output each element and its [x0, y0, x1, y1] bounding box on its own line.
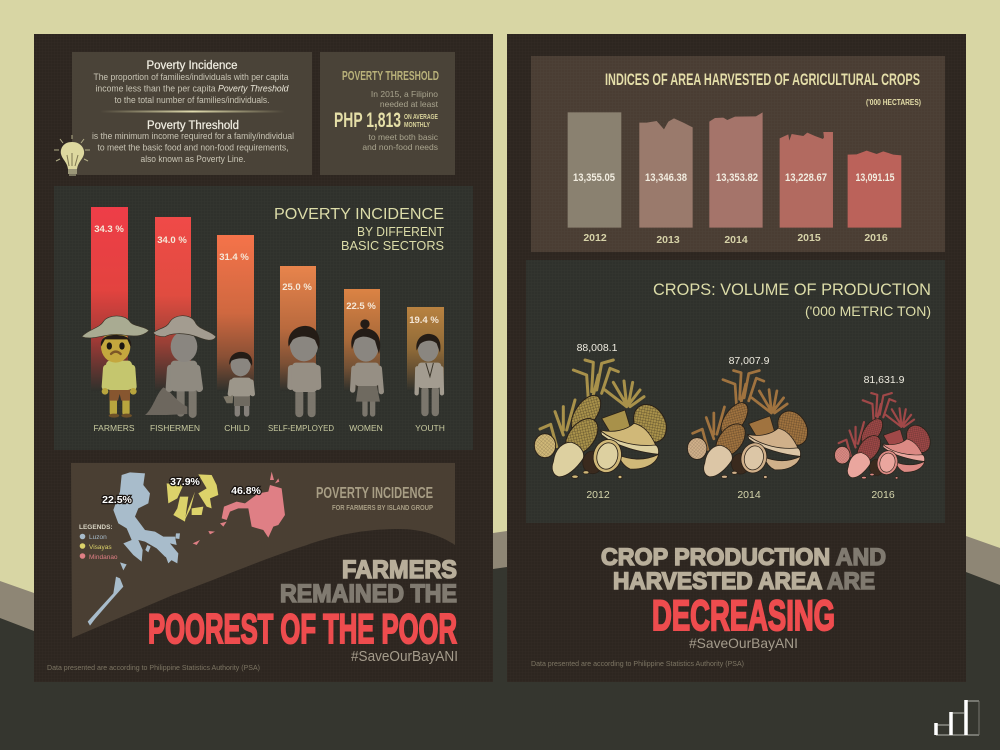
map: Philippines [88, 472, 285, 626]
map region: Mindanao [193, 472, 285, 545]
figure: self-employed [288, 326, 320, 413]
legend [79, 524, 118, 561]
heading: volume of production: CROPS: VOLUME OF PRODUCTION [653, 280, 931, 299]
figure: child [223, 352, 253, 414]
map value labels: 46.8% [231, 485, 262, 497]
labels: sectors: SELF-EMPLOYED [268, 423, 334, 433]
headline: farmers: REMAINED THE [280, 580, 457, 608]
headline: crop production: HARVESTED AREA ARE [613, 568, 875, 595]
bar chart: area harvested: 2016 [864, 232, 888, 244]
map value labels: 37.9% [170, 476, 201, 488]
bar chart: area harvested: 13,091.15 [856, 172, 894, 184]
source note: Data presented are according to Philippine Statistics Authority (PSA) [47, 663, 260, 672]
panel: poverty threshold: POVERTY THRESHOLD [342, 68, 439, 83]
hashtag: #SaveOurBayANI [351, 649, 458, 665]
figure: youth [416, 334, 442, 413]
panel: definitions: Poverty Threshold [147, 120, 239, 132]
heading: sectors: POVERTY INCIDENCE [274, 206, 444, 223]
heading: sectors: BY DIFFERENT [357, 224, 444, 239]
headline: farmers [148, 556, 457, 652]
panel: poverty threshold: needed at least [380, 99, 439, 109]
crops 2016: 81,631.9 [864, 374, 905, 386]
crops 2012: 2012 [586, 489, 610, 501]
icon: light bulb [54, 135, 90, 176]
panel: volume of production [526, 260, 945, 523]
crops 2014 [687, 355, 814, 501]
panel: poverty threshold [320, 52, 455, 175]
figure: fisherman [145, 316, 216, 415]
panel: definitions [72, 52, 312, 175]
labels: sectors: CHILD [224, 423, 250, 433]
map value labels: 22.5% [102, 494, 133, 506]
crops 2014: 87,007.9 [729, 355, 770, 367]
panel: poverty threshold: and non-food needs [362, 142, 438, 152]
bar chart: sectors: 25.0 % [282, 282, 312, 293]
heading: volume of production: ('000 METRIC TON) [805, 303, 931, 319]
labels: sectors: WOMEN [349, 423, 383, 433]
bar chart: sectors: 22.5 % [346, 301, 376, 312]
bar chart: sectors: 34.3 % [94, 224, 124, 235]
crops 2012 [534, 342, 673, 501]
map region: Luzon [88, 472, 180, 626]
panel: definitions: Poverty Incidence [146, 60, 238, 72]
bar chart: area harvested: 2012 [583, 232, 607, 244]
headline: crop production [601, 544, 886, 640]
panel: area harvested [531, 56, 945, 252]
crops 2016: 2016 [871, 489, 895, 501]
headline: farmers: FARMERS [342, 556, 457, 584]
bar chart: area harvested: 13,228.67 [785, 172, 827, 184]
bar chart: area harvested: 2014 [724, 234, 748, 246]
panel: definitions: income less than the per capita Poverty Threshold [96, 84, 289, 94]
figure: farmer [82, 316, 149, 418]
panel: left poster [34, 34, 493, 682]
labels: sectors: FISHERMEN [150, 423, 200, 433]
panel: definitions: to the total number of families/individuals. [114, 95, 270, 105]
panel: island group map [71, 463, 455, 638]
labels: sectors [93, 423, 445, 433]
heading: volume of production [653, 280, 931, 319]
headline: farmers: POOREST OF THE POOR [148, 605, 457, 652]
bar chart: sectors [91, 207, 444, 391]
legend: Mindanao [89, 554, 118, 561]
labels: sectors: YOUTH [415, 423, 445, 433]
heading: map [316, 485, 433, 512]
panel: right poster [507, 34, 966, 682]
bar chart: area harvested [568, 112, 901, 246]
bar chart: sectors: 34.0 % [157, 235, 187, 246]
legend: Visayas [89, 544, 112, 551]
figures: sector people [82, 316, 442, 418]
heading: sectors [274, 206, 444, 253]
heading: map: POVERTY INCIDENCE [316, 485, 433, 502]
bar chart: sectors: 31.4 % [219, 252, 249, 263]
bar chart: area harvested: 13,353.82 [716, 172, 758, 184]
panel: definitions: is the minimum income required for a family/individual [92, 131, 294, 141]
panel: poverty incidence by sector [54, 186, 473, 450]
bar chart: area harvested: 2013 [656, 234, 680, 246]
hashtag: #SaveOurBayANI [689, 635, 798, 651]
source note: Data presented are according to Philippine Statistics Authority (PSA) [531, 659, 744, 668]
heading: area harvested [605, 70, 921, 107]
map value labels [102, 476, 262, 506]
panel: definitions: to meet the basic food and non-food requirements, [98, 142, 288, 152]
heading: sectors: BASIC SECTORS [341, 238, 444, 253]
panel: poverty threshold: to meet both basic [369, 132, 439, 142]
crops 2014: 2014 [737, 489, 761, 501]
heading: area harvested: ('000 HECTARES) [866, 98, 921, 107]
bar chart: area harvested: 2015 [797, 232, 821, 244]
panel: poverty threshold: ON AVERAGE [404, 114, 438, 121]
icon: logo [936, 700, 979, 735]
legend: LEGENDS: [79, 524, 113, 531]
map region: Visayas [167, 474, 218, 522]
panel: definitions: The proportion of families/individuals with per capita [94, 72, 288, 82]
heading: map: FOR FARMERS BY ISLAND GROUP [332, 503, 433, 512]
bar chart: area harvested: 13,346.38 [645, 172, 687, 184]
headline: crop production: DECREASING [652, 592, 835, 640]
figure: woman [351, 319, 381, 414]
bar chart: sectors: 19.4 % [409, 315, 439, 326]
crops 2016 [835, 374, 935, 501]
panel: poverty threshold: MONTHLY [404, 122, 430, 129]
crops 2012: 88,008.1 [577, 342, 618, 354]
headline: crop production: CROP PRODUCTION AND [601, 544, 886, 571]
panel: poverty threshold: PHP 1,813 [334, 109, 401, 132]
panel: definitions: also known as Poverty Line. [140, 154, 246, 164]
legend: Luzon [89, 534, 107, 541]
bar chart: area harvested: 13,355.05 [573, 172, 615, 184]
labels: sectors: FARMERS [93, 423, 135, 433]
panel: poverty threshold: In 2015, a Filipino [371, 89, 438, 99]
